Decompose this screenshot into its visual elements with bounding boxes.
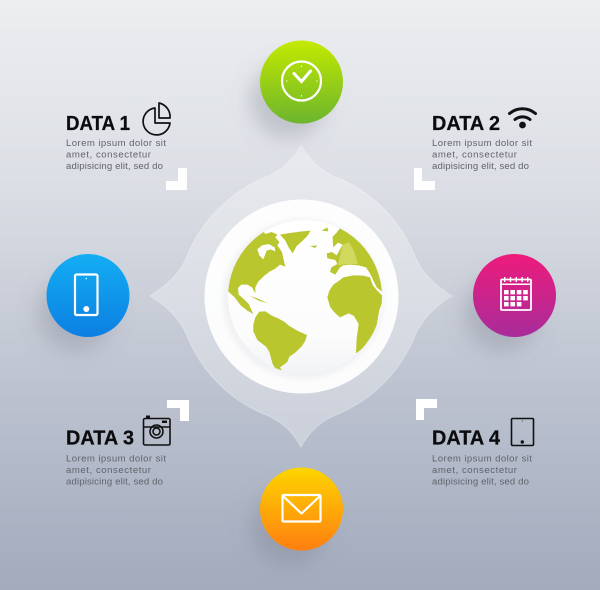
text lines: [432, 138, 532, 172]
icon: clock: [282, 62, 321, 100]
corner bracket 3: [167, 400, 189, 421]
disc soft shadow: [223, 219, 383, 379]
button: orange envelope: [260, 468, 343, 550]
icon: tablet: [512, 418, 534, 446]
block: data 4: [432, 418, 534, 488]
button shadows: [38, 62, 540, 565]
text lines: [66, 454, 166, 488]
text lines: adipisicing elit, sed do: [66, 161, 163, 172]
text lines: amet, consectetur: [66, 465, 152, 476]
text lines: Lorem ipsum dolor sit: [432, 454, 532, 464]
text lines: [66, 138, 166, 172]
panel: compass plate: [150, 145, 452, 447]
icon: calendar: [501, 277, 531, 310]
button: green clock: [260, 40, 343, 124]
text lines: amet, consectetur: [66, 150, 152, 160]
text lines: amet, consectetur: [432, 465, 518, 476]
icon: phone: [75, 274, 98, 315]
block: data 1: [66, 103, 170, 172]
heading: DATA 2: [432, 113, 500, 135]
heading: DATA 1: [66, 113, 130, 135]
block: data 2: [432, 109, 536, 172]
globe: [226, 220, 384, 374]
heading: DATA 4: [432, 428, 501, 450]
corner bracket 1: [166, 168, 187, 190]
icon: camera: [144, 416, 170, 445]
icon: envelope: [282, 495, 320, 522]
text lines: adipisicing elit, sed do: [432, 476, 529, 488]
icon: pie chart: [143, 103, 170, 135]
corner bracket 2: [414, 168, 435, 190]
icon: wifi: [510, 109, 536, 128]
white disc: [204, 200, 398, 394]
button: blue phone: [46, 254, 130, 337]
text lines: [432, 454, 532, 488]
block: data 3: [66, 416, 170, 488]
text lines: Lorem ipsum dolor sit: [66, 454, 166, 464]
text lines: amet, consectetur: [432, 150, 518, 160]
text lines: Lorem ipsum dolor sit: [66, 138, 166, 149]
button: pink calendar: [473, 254, 556, 337]
continents: [226, 220, 384, 374]
heading: DATA 3: [66, 428, 134, 450]
text lines: adipisicing elit, sed do: [66, 476, 163, 488]
text lines: Lorem ipsum dolor sit: [432, 138, 532, 149]
text lines: adipisicing elit, sed do: [432, 161, 529, 172]
corner bracket 4: [416, 399, 437, 420]
